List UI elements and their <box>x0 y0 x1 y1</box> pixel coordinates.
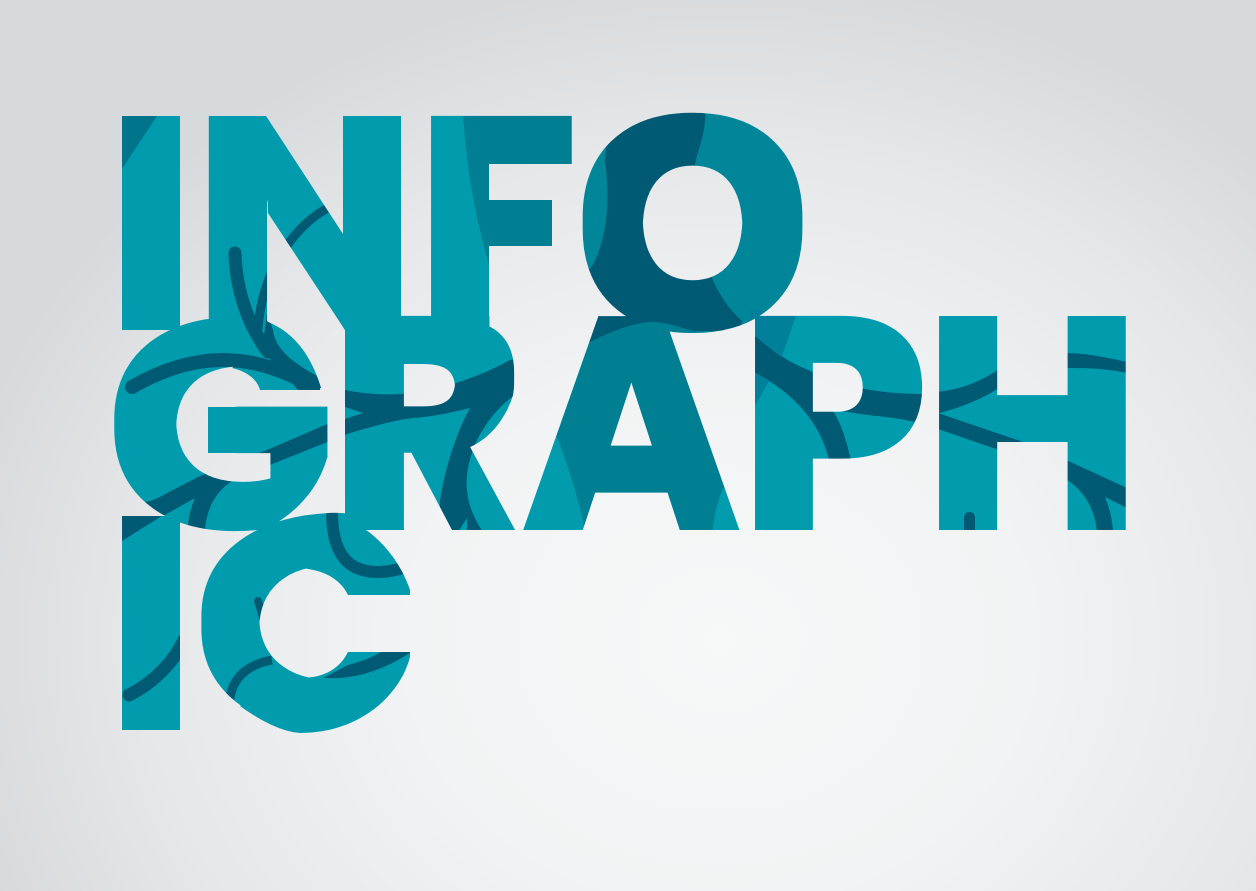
title: INFOGRAPHIC lettering filled with teal pattern <box>100 100 1140 740</box>
letter C short vein <box>258 601 265 624</box>
letter C lower-right vein <box>323 652 410 678</box>
base teal fill <box>100 100 1140 740</box>
letter O tint and dark band <box>582 112 802 342</box>
letter P tints and dark band <box>750 310 925 460</box>
lower I top band <box>122 516 162 541</box>
lower I curved vein <box>129 640 184 695</box>
lower vein across G with branch <box>145 424 347 529</box>
letter C lower-left vein <box>230 660 272 699</box>
letter A tint <box>556 316 810 530</box>
arched vein across G <box>132 360 315 388</box>
letter R wedge <box>345 407 363 419</box>
letter R dark band <box>345 358 522 532</box>
vein with rounded tip through N and G <box>235 253 268 352</box>
letter N curved vein <box>258 208 328 330</box>
letter F tint <box>463 116 572 264</box>
letter H dark bands <box>935 353 1127 536</box>
letter I top-left tint <box>122 116 157 169</box>
vein junction in G <box>264 314 320 390</box>
letter C top vein <box>332 512 406 572</box>
